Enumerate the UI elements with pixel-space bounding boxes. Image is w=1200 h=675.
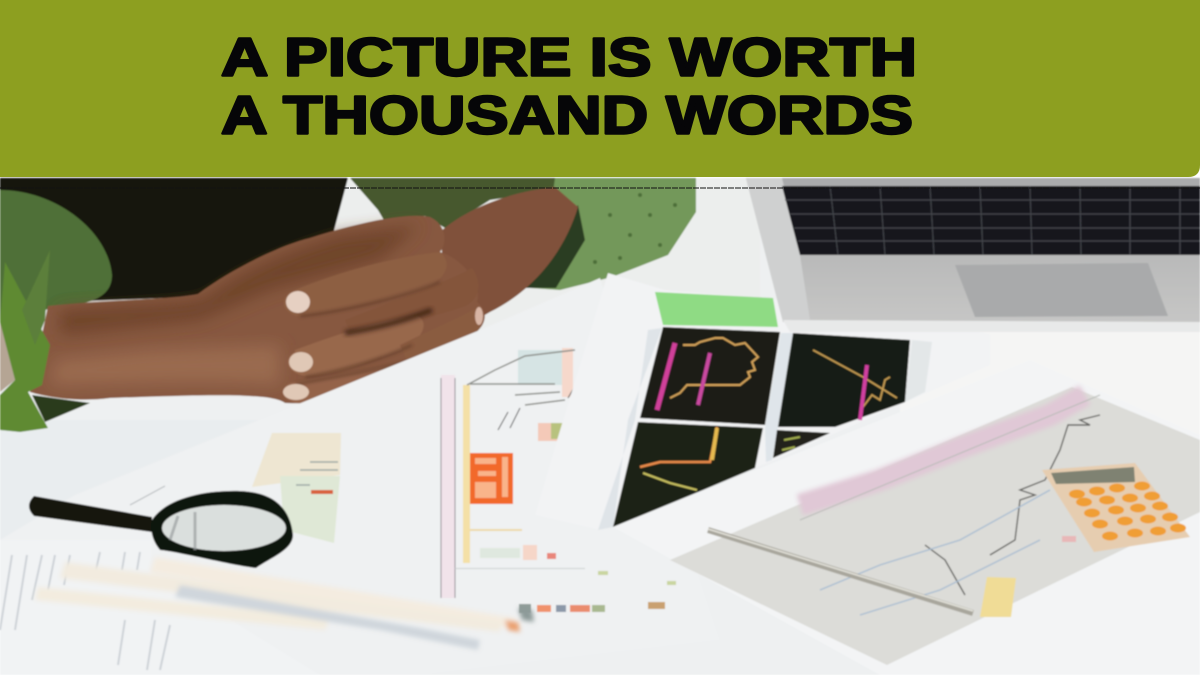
colour strip	[519, 602, 665, 613]
finger: fifth	[282, 350, 467, 403]
finger: fourth	[400, 306, 484, 368]
photo: silver pen	[708, 529, 1016, 617]
photo: large chart sheet	[613, 360, 1200, 675]
photo: beige inset card	[252, 433, 341, 543]
photo: dark top	[0, 178, 348, 302]
photo: laptop	[746, 178, 1200, 332]
photo: upper sleeve	[350, 178, 580, 228]
photo: full scene	[0, 178, 1200, 675]
photo background: desk	[0, 178, 1200, 675]
finger: top	[284, 252, 447, 316]
title	[221, 28, 917, 146]
title: A PICTURE IS WORTH	[221, 28, 917, 88]
photo: sheet with dark chart panels	[535, 273, 990, 530]
icon: magnifying glass	[29, 491, 293, 568]
title: A THOUSAND WORDS	[221, 86, 913, 146]
finger: second	[345, 268, 478, 332]
photo: calculator	[1042, 463, 1190, 552]
photo: clasped hands	[30, 187, 578, 403]
orange label	[470, 453, 513, 504]
photo: pencils	[35, 557, 534, 650]
photo: left document with columns	[0, 540, 320, 675]
photo: right sleeve	[525, 178, 696, 290]
photo: paper with printed chart	[0, 278, 720, 675]
photo: sleeve leaf and cuff	[0, 250, 90, 432]
title banner	[0, 0, 1200, 177]
finger: third	[288, 316, 424, 376]
chart lines	[640, 338, 897, 490]
photo: left sleeve	[0, 190, 112, 392]
